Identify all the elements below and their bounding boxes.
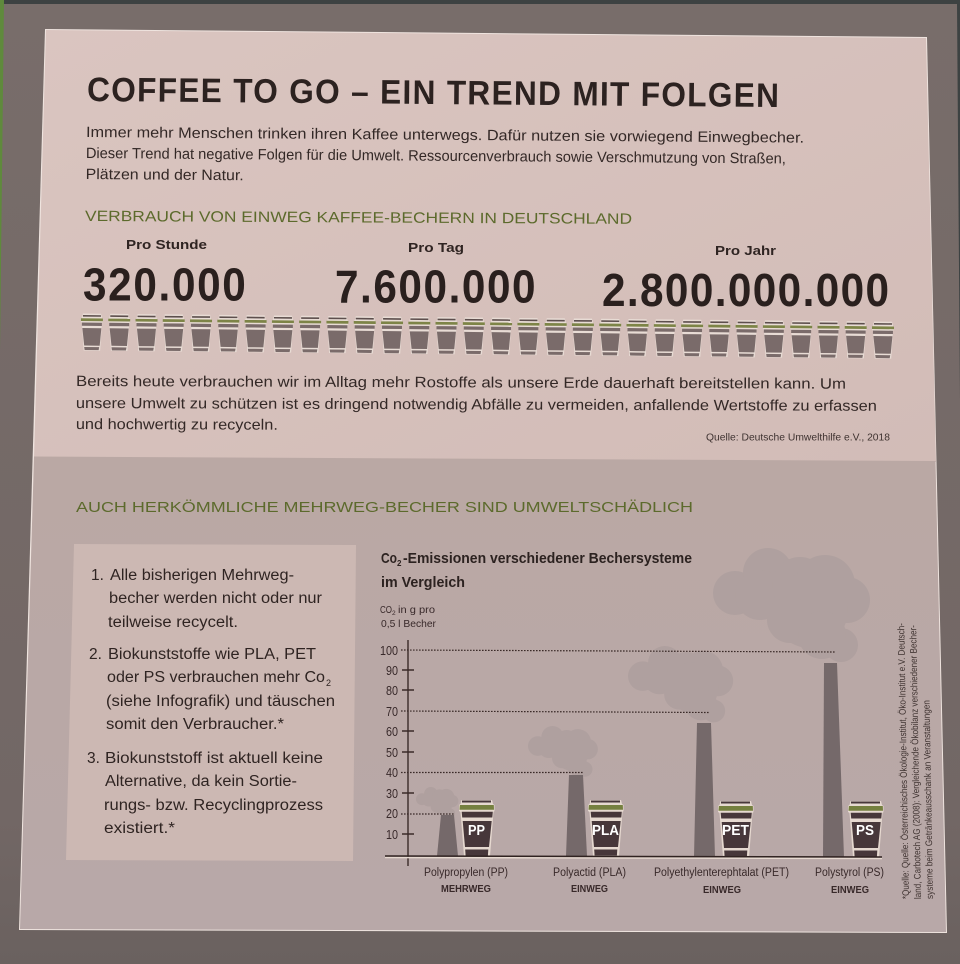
cup: PET: PET <box>722 823 749 839</box>
label: PET: Polyethylenterephtalat (PET) <box>654 867 789 879</box>
intro text: Immer mehr Menschen trinken ihren Kaffee unterwegs. Dafür nutzen sie vorwiegend Einwegbecher. <box>86 124 804 147</box>
label: PP <box>424 867 508 895</box>
label: PS <box>815 867 884 896</box>
y axis with ticks and labels: 70 <box>386 705 398 719</box>
cup: PP <box>459 800 494 856</box>
y axis caption <box>380 604 436 630</box>
y axis with ticks and labels: 30 <box>386 787 398 801</box>
y axis with ticks and labels: 80 <box>386 684 398 698</box>
list item 3: Alternative, da kein Sortie- <box>105 773 297 790</box>
y axis with ticks and labels <box>380 640 414 866</box>
intro text: Dieser Trend hat negative Folgen für die Umwelt. Ressourcenverbrauch sowie Verschmutzung von Straßen, <box>86 145 786 167</box>
chart title: -Emissionen verschiedener Bechersysteme <box>403 550 692 567</box>
list item 1 <box>91 567 322 631</box>
stat: per day <box>335 240 536 313</box>
rotated source note: *Quelle: Quelle: Österreichisches Ökologie-Institut, Öko-Institut e.V. Deutsch- <box>896 623 912 899</box>
list item 2: somit den Verbraucher.* <box>106 716 284 733</box>
source: Quelle: Deutsche Umwelthilfe e.V., 2018 <box>706 432 890 444</box>
cup row <box>81 314 894 359</box>
cloud: PLA <box>528 726 598 777</box>
y axis caption: CO <box>380 604 392 616</box>
list item 2: oder PS verbrauchen mehr Co <box>107 669 325 686</box>
title: COFFEE TO GO – EIN TREND MIT FOLGEN <box>87 70 779 114</box>
label: PP: Polypropylen (PP) <box>424 867 508 879</box>
intro text: Plätzen und der Natur. <box>86 166 244 184</box>
stat: per year <box>602 243 889 316</box>
label: PS: EINWEG <box>831 884 869 896</box>
chimney: PS <box>823 663 844 857</box>
rotated source note <box>896 623 936 899</box>
y axis with ticks and labels: 50 <box>386 746 398 760</box>
reference lines <box>401 650 836 814</box>
body text: und hochwertig zu recyceln. <box>76 416 278 434</box>
cup: PET <box>718 801 754 857</box>
chart title: Co <box>381 550 397 567</box>
stat: per hour: Pro Stunde <box>126 237 207 252</box>
list item 3: rungs- bzw. Recyclingprozess <box>104 797 323 814</box>
list item 2: Biokunststoffe wie PLA, PET <box>108 646 317 663</box>
rotated source note: systeme beim Getränkeausschank an Veranstaltungen <box>922 700 936 899</box>
list item 3: Biokunststoff ist aktuell keine <box>105 750 323 767</box>
heading: reusable cups: AUCH HERKÖMMLICHE MEHRWEG-BECHER SIND UMWELTSCHÄDLICH <box>76 498 693 516</box>
stat: per hour <box>83 237 246 311</box>
y axis with ticks and labels: 60 <box>386 725 398 739</box>
label: PLA <box>553 867 626 895</box>
stat: per year: Pro Jahr <box>715 243 776 258</box>
cloud: PS <box>713 548 870 662</box>
y axis with ticks and labels: 10 <box>386 828 398 842</box>
panel: lower section <box>20 456 946 932</box>
label: PLA: Polyactid (PLA) <box>553 867 626 879</box>
y axis caption: 0,5 l Becher <box>381 618 436 630</box>
body text <box>76 373 877 436</box>
chimney: PP <box>437 815 458 856</box>
panel: numbered list <box>66 544 356 861</box>
stat: per day: 7.600.000 <box>335 262 536 313</box>
body text: Bereits heute verbrauchen wir im Alltag mehr Rostoffe als unsere Erde dauerhaft bereitstellen kann. Um <box>76 373 846 393</box>
panel: upper section <box>34 30 936 462</box>
cloud: PET <box>628 646 733 722</box>
chart title: 2 <box>397 559 402 568</box>
label: PS: Polystyrol (PS) <box>815 867 884 879</box>
chimney: PLA <box>566 775 587 856</box>
list item 2: 2 <box>326 678 331 688</box>
list item 1: becher werden nicht oder nur <box>109 590 322 607</box>
cup: PP: PP <box>468 823 485 839</box>
cup: PS <box>848 801 884 857</box>
cloud: PP <box>416 787 458 818</box>
y axis with ticks and labels: 40 <box>386 766 398 780</box>
cup: PLA: PLA <box>592 823 619 839</box>
list item 2: 2. <box>89 646 102 663</box>
rotated source note: land, Carbotech AG (2008): Vergleichende Ökobilanz verschiedener Becher- <box>908 625 924 899</box>
stat: per hour: 320.000 <box>83 260 246 311</box>
label: PLA: EINWEG <box>571 883 608 895</box>
list item 1: Alle bisherigen Mehrweg- <box>110 567 294 584</box>
list item 3 <box>87 750 323 837</box>
y axis with ticks and labels: 100 <box>380 644 398 658</box>
label: PP: MEHRWEG <box>441 883 491 895</box>
stat: per year: 2.800.000.000 <box>602 265 889 316</box>
y axis caption: 2 <box>392 610 396 617</box>
cup: PS: PS <box>856 823 874 839</box>
chart: CO2 emissions <box>380 548 884 896</box>
chart title <box>381 550 692 591</box>
y axis with ticks and labels: 20 <box>386 807 398 821</box>
y axis caption: in g pro <box>398 604 435 616</box>
list item 2 <box>89 646 335 733</box>
list item 2: (siehe Infografik) und täuschen <box>106 693 335 710</box>
y axis with ticks and labels: 90 <box>386 664 398 678</box>
body text: unsere Umwelt zu schützen ist es dringend notwendig Abfälle zu vermeiden, anfallende Wertstoffe zu erfassen <box>76 395 877 415</box>
label: PET <box>654 867 789 896</box>
chart title: im Vergleich <box>381 574 465 591</box>
heading: consumption: VERBRAUCH VON EINWEG KAFFEE-BECHERN IN DEUTSCHLAND <box>85 208 632 228</box>
label: PET: EINWEG <box>703 884 741 896</box>
cup: PLA <box>588 800 624 856</box>
list item 3: existiert.* <box>104 820 175 837</box>
list item 1: 1. <box>91 567 104 584</box>
x axis <box>385 856 882 858</box>
list item 3: 3. <box>87 750 100 767</box>
list item 1: teilweise recycelt. <box>108 614 238 631</box>
intro text <box>86 124 804 189</box>
stat: per day: Pro Tag <box>408 240 464 255</box>
chimney: PET <box>694 723 715 857</box>
